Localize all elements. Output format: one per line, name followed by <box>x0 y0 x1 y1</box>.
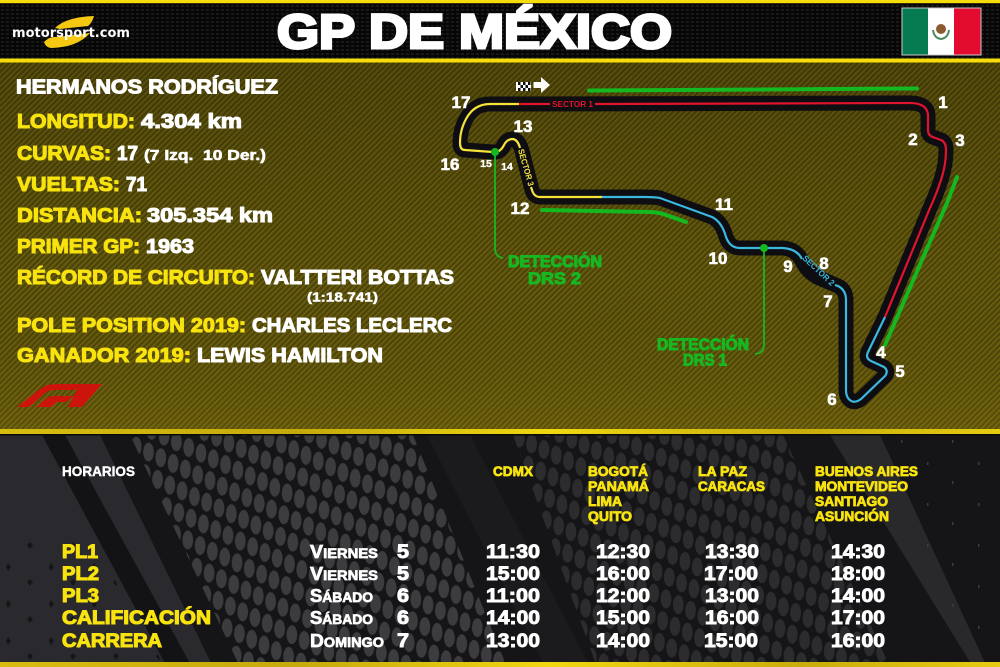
text block: schedule column headers: PANAMÁ <box>588 478 649 494</box>
track surface <box>460 103 946 402</box>
text block: circuit facts: 1963 <box>146 235 194 258</box>
corner numbers: 13 <box>514 117 532 136</box>
text block: circuit facts: LEWIS HAMILTON <box>197 344 383 367</box>
text block: schedule column headers: BUENOS AIRES <box>815 463 918 479</box>
text block: schedule column headers: CARACAS <box>698 478 765 494</box>
text block: circuit facts: (7 Izq. 10 Der.) <box>144 148 266 164</box>
text block: schedule column headers: SANTIAGO <box>815 493 888 509</box>
corner numbers: 8 <box>819 254 829 273</box>
DRS zones <box>542 88 957 345</box>
text block: circuit facts: VALTTERI BOTTAS <box>261 266 454 289</box>
text block: circuit facts: VUELTAS: <box>17 173 120 196</box>
callout: DRS detection 2: DRS 2 <box>528 269 581 288</box>
sector 3 line <box>460 104 602 197</box>
sector labels: SECTOR 2 <box>801 253 837 288</box>
table: CDMX times: 11:30 <box>486 542 540 563</box>
text block: schedule column headers: HORARIOS <box>62 464 135 479</box>
callout: DRS detection 2 <box>491 148 602 288</box>
text block: session names <box>62 542 211 652</box>
corner numbers: 3 <box>955 131 965 150</box>
corner numbers: 12 <box>511 199 529 218</box>
table: La Paz, Caracas times: 15:00 <box>704 631 758 652</box>
callout: DRS detection 1: DRS 1 <box>683 350 727 370</box>
corner numbers: 1 <box>938 93 948 112</box>
text block: session days: 6 <box>397 586 409 607</box>
corner numbers: 9 <box>783 257 793 276</box>
corner numbers <box>441 93 965 409</box>
table: Bogotá, Panamá, Lima, Quito times: 12:00 <box>596 586 650 607</box>
table: CDMX times <box>486 542 540 652</box>
table: Bogotá, Panamá, Lima, Quito times: 14:00 <box>596 631 650 652</box>
sector 2 line <box>602 197 887 402</box>
text block: schedule column headers: BOGOTÁ <box>588 463 648 479</box>
text block: session days: 6 <box>397 608 409 629</box>
corner numbers: 2 <box>908 130 918 149</box>
text block: schedule column headers: ASUNCIÓN <box>815 507 889 524</box>
icon: start flag and arrow <box>516 77 550 93</box>
text block: session names: PL3 <box>62 586 99 607</box>
text block: circuit facts: DISTANCIA: <box>17 204 142 227</box>
text block: circuit facts: LONGITUD: <box>17 110 135 133</box>
text block: schedule column headers: MONTEVIDEO <box>815 478 908 494</box>
table: Buenos Aires, Montevideo, Santiago, Asunción times <box>831 542 885 652</box>
text block: session days: SÁBADO <box>310 586 373 606</box>
logo: motorsport.com: motorsport.com <box>12 25 130 41</box>
panel: circuit information <box>0 62 1000 430</box>
table: La Paz, Caracas times: 13:00 <box>705 586 759 607</box>
logo: motorsport.com <box>12 16 130 48</box>
text block: circuit facts: PRIMER GP: <box>17 235 140 258</box>
header band <box>0 0 1000 63</box>
callout: DRS detection 2: DETECCIÓN <box>508 252 602 271</box>
text block: circuit facts: (1:18.741) <box>307 290 378 304</box>
table: Bogotá, Panamá, Lima, Quito times: 16:00 <box>596 564 650 585</box>
table: CDMX times: 15:00 <box>486 564 540 585</box>
table: La Paz, Caracas times: 17:00 <box>704 564 758 585</box>
table: Bogotá, Panamá, Lima, Quito times: 15:00 <box>596 608 650 629</box>
table: Bogotá, Panamá, Lima, Quito times: 12:30 <box>596 542 650 563</box>
panel: schedule background <box>0 429 1000 667</box>
icon: F1 logo <box>17 384 102 407</box>
text block: session days: 5 <box>397 542 409 563</box>
sector labels: SECTOR 3 <box>516 148 536 187</box>
text block: circuit facts: 17 <box>117 142 138 165</box>
text block: session names: PL2 <box>62 564 99 585</box>
text block: session days: 7 <box>397 631 409 652</box>
table: Buenos Aires, Montevideo, Santiago, Asunción times: 16:00 <box>831 631 885 652</box>
table: La Paz, Caracas times: 13:30 <box>705 542 759 563</box>
corner numbers: 5 <box>895 362 905 381</box>
table: La Paz, Caracas times <box>704 542 759 652</box>
text block: session names: CARRERA <box>62 631 162 652</box>
text block: circuit facts: CURVAS: <box>17 142 111 165</box>
text block: schedule column headers <box>62 463 918 524</box>
table: CDMX times: 13:00 <box>486 631 540 652</box>
text block: circuit facts: 71 <box>126 173 147 196</box>
text block: session names: PL1 <box>62 542 98 563</box>
sector labels: SECTOR 1 <box>552 99 593 109</box>
text block: circuit facts <box>17 110 454 367</box>
title: GP DE MÉXICO <box>277 5 672 59</box>
table: CDMX times: 14:00 <box>486 608 540 629</box>
text block: session names: CALIFICACIÓN <box>62 607 211 629</box>
table: La Paz, Caracas times: 16:00 <box>705 608 759 629</box>
corner numbers: 6 <box>827 390 837 409</box>
corner numbers: 15 <box>480 158 492 170</box>
sector labels <box>516 99 837 288</box>
corner numbers: 16 <box>441 155 459 174</box>
text block: circuit facts: 4.304 km <box>141 110 242 133</box>
icon: Mexican flag <box>902 8 981 55</box>
callout: DRS detection 1: DETECCIÓN <box>657 335 749 354</box>
text block: session days: VIERNES <box>310 564 378 584</box>
callout: DRS detection 1 <box>657 244 768 370</box>
sector 1 line <box>519 103 946 317</box>
text block: circuit facts: GANADOR 2019: <box>17 344 191 367</box>
text block: circuit facts: CHARLES LECLERC <box>252 314 452 337</box>
text block: session days: 5 <box>397 564 409 585</box>
corner numbers: 4 <box>876 343 886 362</box>
table: CDMX times: 11:00 <box>486 586 540 607</box>
text block: schedule column headers: CDMX <box>493 463 534 479</box>
text block: session days: SÁBADO <box>310 608 373 628</box>
text block: circuit facts: RÉCORD DE CIRCUITO: <box>17 266 255 289</box>
text block: circuit facts: 305.354 km <box>147 204 273 227</box>
text block: schedule column headers: LA PAZ <box>698 463 747 479</box>
table: Buenos Aires, Montevideo, Santiago, Asunción times: 17:00 <box>831 608 885 629</box>
corner numbers: 14 <box>501 161 513 173</box>
corner numbers: 11 <box>715 195 733 214</box>
corner numbers: 7 <box>823 292 833 311</box>
text block: circuit name: HERMANOS RODRÍGUEZ <box>16 76 278 98</box>
text block: session days <box>310 542 409 652</box>
corner numbers: 10 <box>709 249 727 268</box>
table: Buenos Aires, Montevideo, Santiago, Asunción times: 18:00 <box>831 564 885 585</box>
table: Buenos Aires, Montevideo, Santiago, Asunción times: 14:30 <box>831 542 885 563</box>
text block: circuit facts: POLE POSITION 2019: <box>17 314 246 337</box>
text block: schedule column headers: LIMA <box>588 493 622 509</box>
text block: schedule column headers: QUITO <box>588 508 632 524</box>
chart: circuit track map <box>441 77 965 409</box>
corner numbers: 17 <box>452 93 470 112</box>
text block: session days: VIERNES <box>310 542 378 562</box>
table: Bogotá, Panamá, Lima, Quito times <box>596 542 650 652</box>
table: Buenos Aires, Montevideo, Santiago, Asunción times: 14:00 <box>831 586 885 607</box>
text block: session days: DOMINGO <box>310 631 384 651</box>
